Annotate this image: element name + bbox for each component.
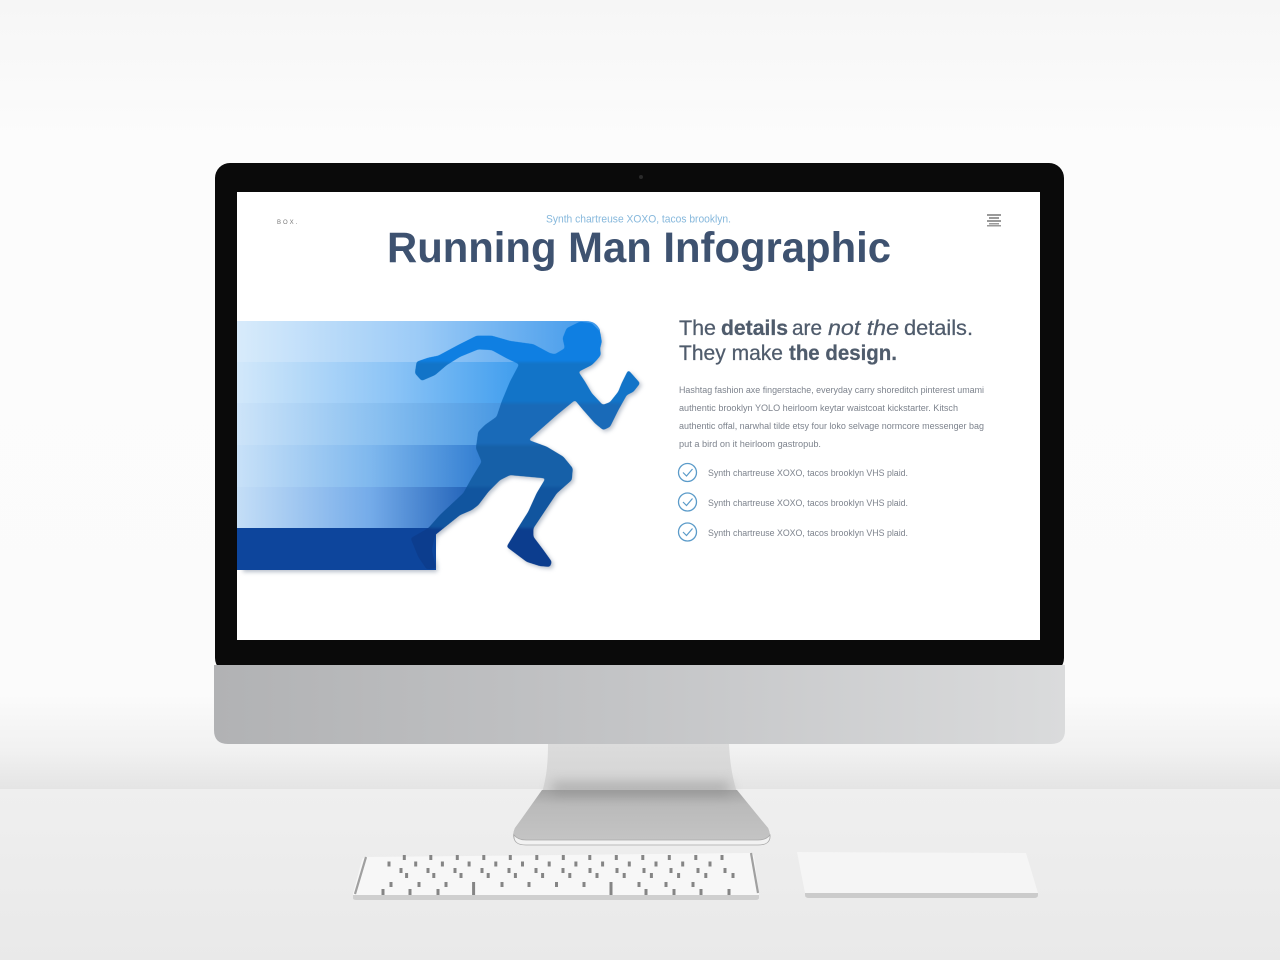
- runner silhouette: [412, 322, 640, 569]
- icon: menu: [987, 214, 1001, 226]
- subtitle: Synth chartreuse XOXO, tacos brooklyn.: [546, 214, 731, 226]
- screen: [237, 192, 1040, 640]
- body text: authentic offal, narwhal tilde etsy four loko selvage normcore messenger bag: [679, 421, 984, 431]
- checklist: [678, 464, 908, 541]
- monitor stand: [513, 744, 770, 845]
- item 1: Synth chartreuse XOXO, tacos brooklyn VHS plaid.: [708, 468, 908, 478]
- running man graphic: [237, 310, 652, 582]
- heading: They make: [679, 342, 783, 365]
- speed stripes: [237, 321, 600, 570]
- shadow: [243, 312, 652, 582]
- heading: The: [679, 317, 716, 340]
- heading: the design.: [789, 342, 897, 365]
- webcam: [639, 175, 643, 179]
- item 3: Synth chartreuse XOXO, tacos brooklyn VHS plaid.: [708, 528, 908, 538]
- item 2: Synth chartreuse XOXO, tacos brooklyn VHS plaid.: [708, 498, 908, 508]
- heading: [679, 317, 973, 365]
- title: Running Man Infographic: [387, 224, 891, 272]
- heading: are: [792, 317, 822, 340]
- body text: authentic brooklyn YOLO heirloom keytar waistcoat kickstarter. Kitsch: [679, 403, 958, 413]
- trackpad: [797, 852, 1038, 898]
- body text: Hashtag fashion axe fingerstache, everyday carry shoreditch pinterest umami: [679, 385, 984, 395]
- monitor chin: [214, 665, 1065, 744]
- heading: not the: [828, 317, 899, 340]
- keyboard: [353, 853, 759, 900]
- body text: put a bird on it heirloom gastropub.: [679, 439, 821, 449]
- heading: details: [721, 317, 788, 340]
- brand label: BOX.: [277, 220, 299, 226]
- heading: details.: [904, 317, 973, 340]
- item 3: [678, 523, 908, 541]
- body text: [679, 385, 984, 449]
- monitor: [214, 163, 1065, 744]
- item 2: [678, 493, 908, 511]
- item 1: [678, 464, 908, 482]
- desk surface: [0, 789, 1280, 960]
- monitor bezel: [215, 163, 1064, 673]
